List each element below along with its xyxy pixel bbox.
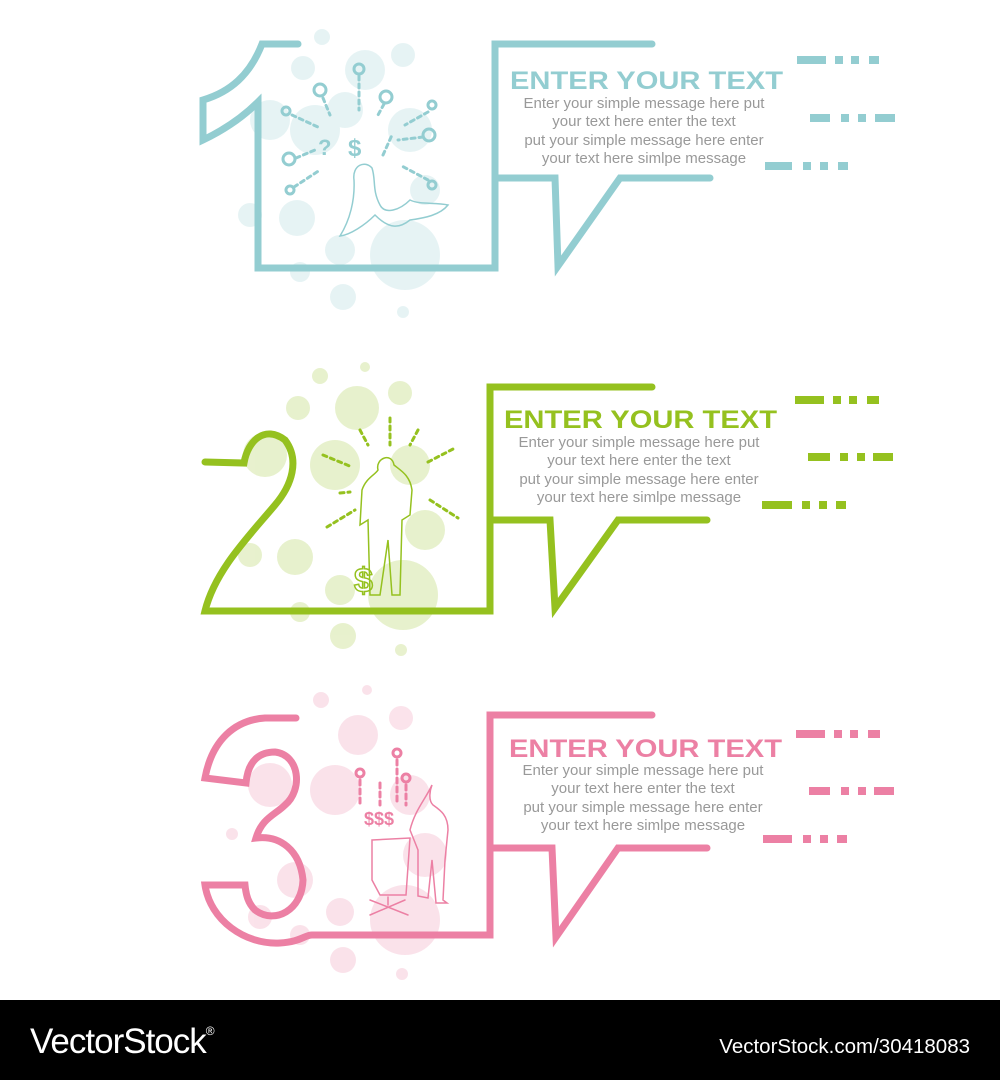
body text 3 — [523, 762, 764, 834]
body text 2 — [519, 434, 760, 506]
icon text: dollars: $$$ — [364, 809, 394, 829]
panel: step 1 — [203, 29, 895, 318]
body text 1 — [524, 95, 765, 167]
dashes 1 — [765, 56, 895, 170]
bubbles 2 — [238, 362, 445, 656]
speech bubble 1 — [495, 178, 710, 266]
body text 1: Enter your simple message here put — [524, 95, 765, 112]
icon text: dollar: $ — [354, 562, 373, 600]
body text 2: your text here enter the text — [547, 452, 732, 469]
number 3 — [205, 715, 652, 943]
panel: step 1: $ — [348, 135, 362, 162]
body text 1: your text here enter the text — [552, 113, 737, 130]
number 2 — [205, 387, 652, 611]
footer logo: ® — [206, 1024, 215, 1038]
footer url: VectorStock.com/30418083 — [719, 1035, 970, 1058]
speech bubble 3 — [490, 848, 707, 937]
speech bubble 2 — [490, 520, 707, 608]
heading 3: ENTER YOUR TEXT — [509, 735, 782, 763]
icon: ideas and man sitting — [282, 64, 448, 236]
body text 1: your text here simlpe message — [542, 150, 746, 167]
bubbles 1 — [238, 29, 440, 318]
bubbles 3 — [226, 685, 447, 980]
footer bar — [0, 1000, 1000, 1080]
body text 1: put your simple message here enter — [524, 132, 764, 149]
dashes 2 — [762, 396, 893, 509]
icon: chart, man and chair — [356, 749, 448, 915]
body text 2: Enter your simple message here put — [519, 434, 760, 451]
panel: step 2 — [205, 362, 893, 656]
dashes 3 — [763, 730, 894, 843]
body text 3: your text here simlpe message — [541, 817, 745, 834]
body text 3: Enter your simple message here put — [523, 762, 764, 779]
panel: step 3 — [205, 685, 894, 980]
body text 3: put your simple message here enter — [523, 799, 763, 816]
body text 2: your text here simlpe message — [537, 489, 741, 506]
footer logo: VectorStock — [30, 1022, 206, 1061]
heading 1: ENTER YOUR TEXT — [510, 67, 783, 95]
number 1 — [203, 44, 652, 268]
icon: man with rays — [323, 418, 458, 595]
icon text: question and dollar: ? — [318, 135, 331, 160]
heading 2: ENTER YOUR TEXT — [504, 406, 777, 434]
body text 3: your text here enter the text — [551, 780, 736, 797]
body text 2: put your simple message here enter — [519, 471, 759, 488]
